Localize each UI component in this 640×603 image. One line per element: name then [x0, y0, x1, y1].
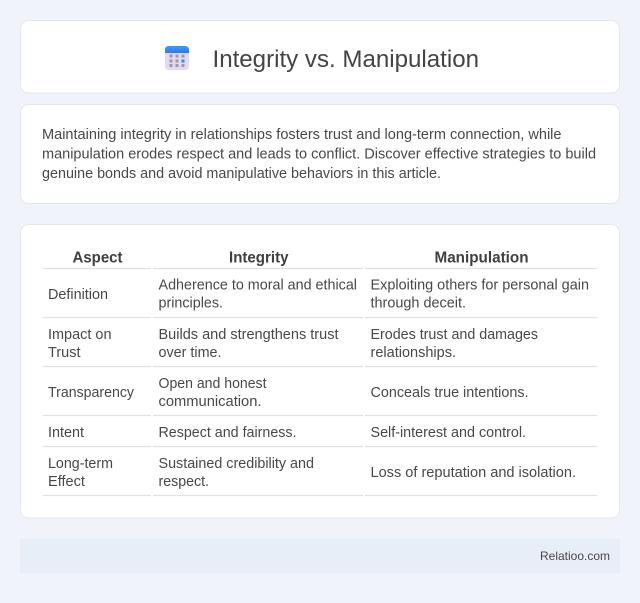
row: impact on trust: over time.	[158, 345, 222, 361]
row: long-term effect: Sustained credibility and	[158, 456, 314, 472]
panel: comparison table	[20, 224, 620, 518]
row: definition: through deceit.	[370, 296, 466, 312]
row: impact on trust: Erodes trust and damages	[370, 327, 538, 343]
intro paragraph	[42, 127, 596, 182]
table header row: Integrity	[229, 250, 289, 266]
row: long-term effect: Long-term	[48, 456, 113, 472]
row: transparency: Conceals true intentions.	[370, 385, 528, 401]
intro paragraph: genuine bonds and avoid manipulative behaviors in this article.	[42, 166, 441, 182]
intro paragraph: manipulation erodes respect and leads to conflict. Discover effective strategies to build	[42, 146, 596, 162]
row: impact on trust: Impact on	[48, 327, 112, 343]
row: long-term effect	[48, 456, 576, 490]
panel: intro text	[20, 104, 620, 204]
row: long-term effect: Loss of reputation and isolation.	[370, 465, 576, 481]
row: transparency: communication.	[158, 394, 262, 410]
table header row	[72, 250, 528, 266]
row: long-term effect: respect.	[158, 474, 209, 490]
row: transparency: Transparency	[48, 385, 135, 401]
icon: calendar	[165, 46, 189, 70]
intro paragraph: Maintaining integrity in relationships fosters trust and long-term connection, while	[42, 127, 562, 143]
row: transparency: Open and honest	[158, 376, 266, 392]
row: definition: Exploiting others for personal gain	[370, 278, 589, 294]
table header row: Aspect	[72, 250, 123, 266]
row: transparency	[48, 376, 528, 410]
panel: title header	[20, 20, 620, 93]
row: long-term effect: Effect	[48, 474, 85, 490]
row: definition	[48, 278, 589, 312]
table header row: Manipulation	[434, 250, 528, 266]
row: impact on trust: Trust	[48, 345, 80, 361]
row: impact on trust: relationships.	[370, 345, 456, 361]
row: definition: Definition	[48, 287, 108, 303]
row: impact on trust: Builds and strengthens trust	[158, 327, 338, 343]
row: definition: Adherence to moral and ethical	[158, 278, 357, 294]
footer credit: Relatioo.com	[540, 549, 610, 563]
row: intent: Respect and fairness.	[158, 425, 296, 441]
title: Integrity vs. Manipulation	[212, 46, 479, 73]
footer bar	[20, 539, 620, 573]
row: impact on trust	[48, 327, 538, 361]
row: definition: principles.	[158, 296, 223, 312]
row: intent: Self-interest and control.	[370, 425, 526, 441]
row: intent	[48, 425, 526, 441]
row: intent: Intent	[48, 425, 84, 441]
